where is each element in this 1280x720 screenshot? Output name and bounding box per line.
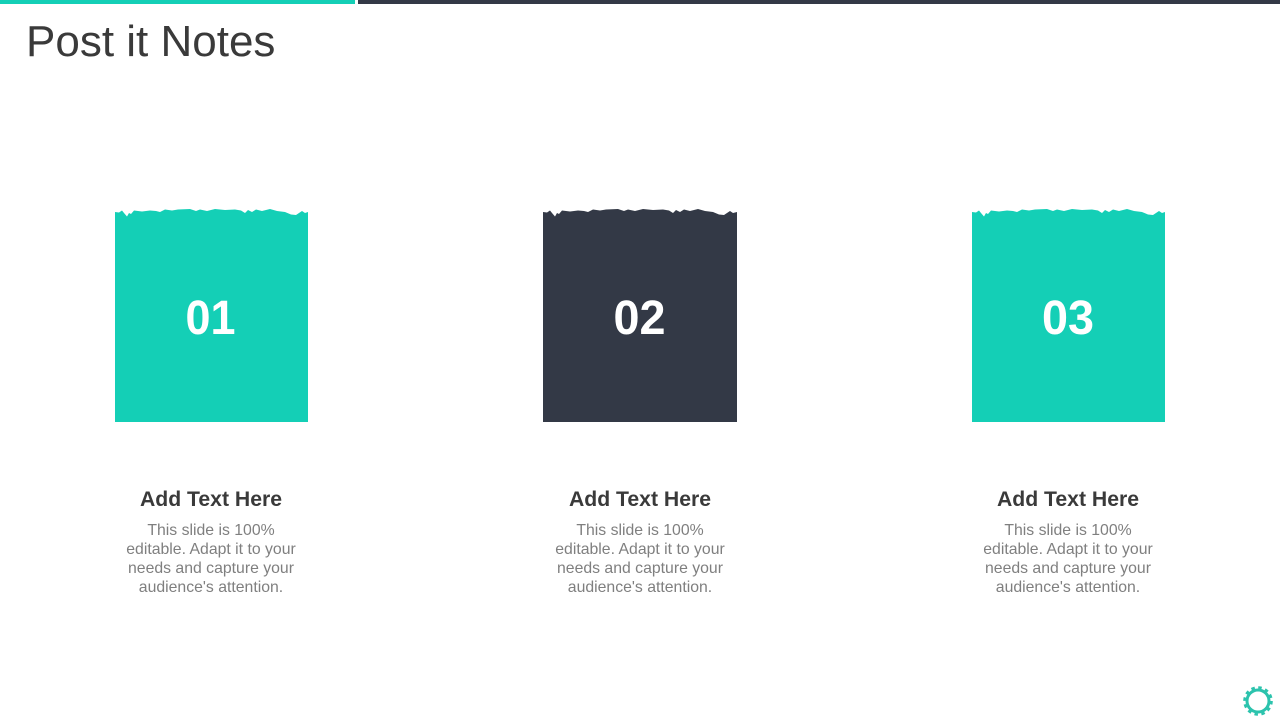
caption 03: audience's attention. [996, 579, 1140, 596]
caption 03: This slide is 100% [1004, 522, 1132, 539]
caption 03: needs and capture your [985, 560, 1151, 577]
caption 02: audience's attention. [568, 579, 712, 596]
caption 01: needs and capture your [128, 560, 294, 577]
caption 01 [126, 488, 296, 596]
caption 01: editable. Adapt it to your [126, 541, 296, 558]
top accent bar: navy [358, 0, 1280, 4]
caption 02: Add Text Here [569, 488, 711, 510]
title: Post it Notes [26, 17, 275, 66]
caption 02: editable. Adapt it to your [555, 541, 725, 558]
note 01: 01 [186, 292, 236, 345]
caption 02 [555, 488, 725, 596]
caption 01: This slide is 100% [147, 522, 275, 539]
caption 01: Add Text Here [140, 488, 282, 510]
note 02: 02 [614, 292, 666, 345]
note 01 [115, 209, 308, 422]
icon: gear [1243, 686, 1273, 716]
note 03: 03 [1042, 292, 1094, 345]
note 02 [543, 209, 737, 422]
caption 01: audience's attention. [139, 579, 283, 596]
caption 02: This slide is 100% [576, 522, 704, 539]
caption 03: Add Text Here [997, 488, 1139, 510]
note 03 [972, 209, 1165, 422]
caption 03 [983, 488, 1153, 596]
top accent bar: teal [0, 0, 355, 4]
caption 02: needs and capture your [557, 560, 723, 577]
caption 03: editable. Adapt it to your [983, 541, 1153, 558]
